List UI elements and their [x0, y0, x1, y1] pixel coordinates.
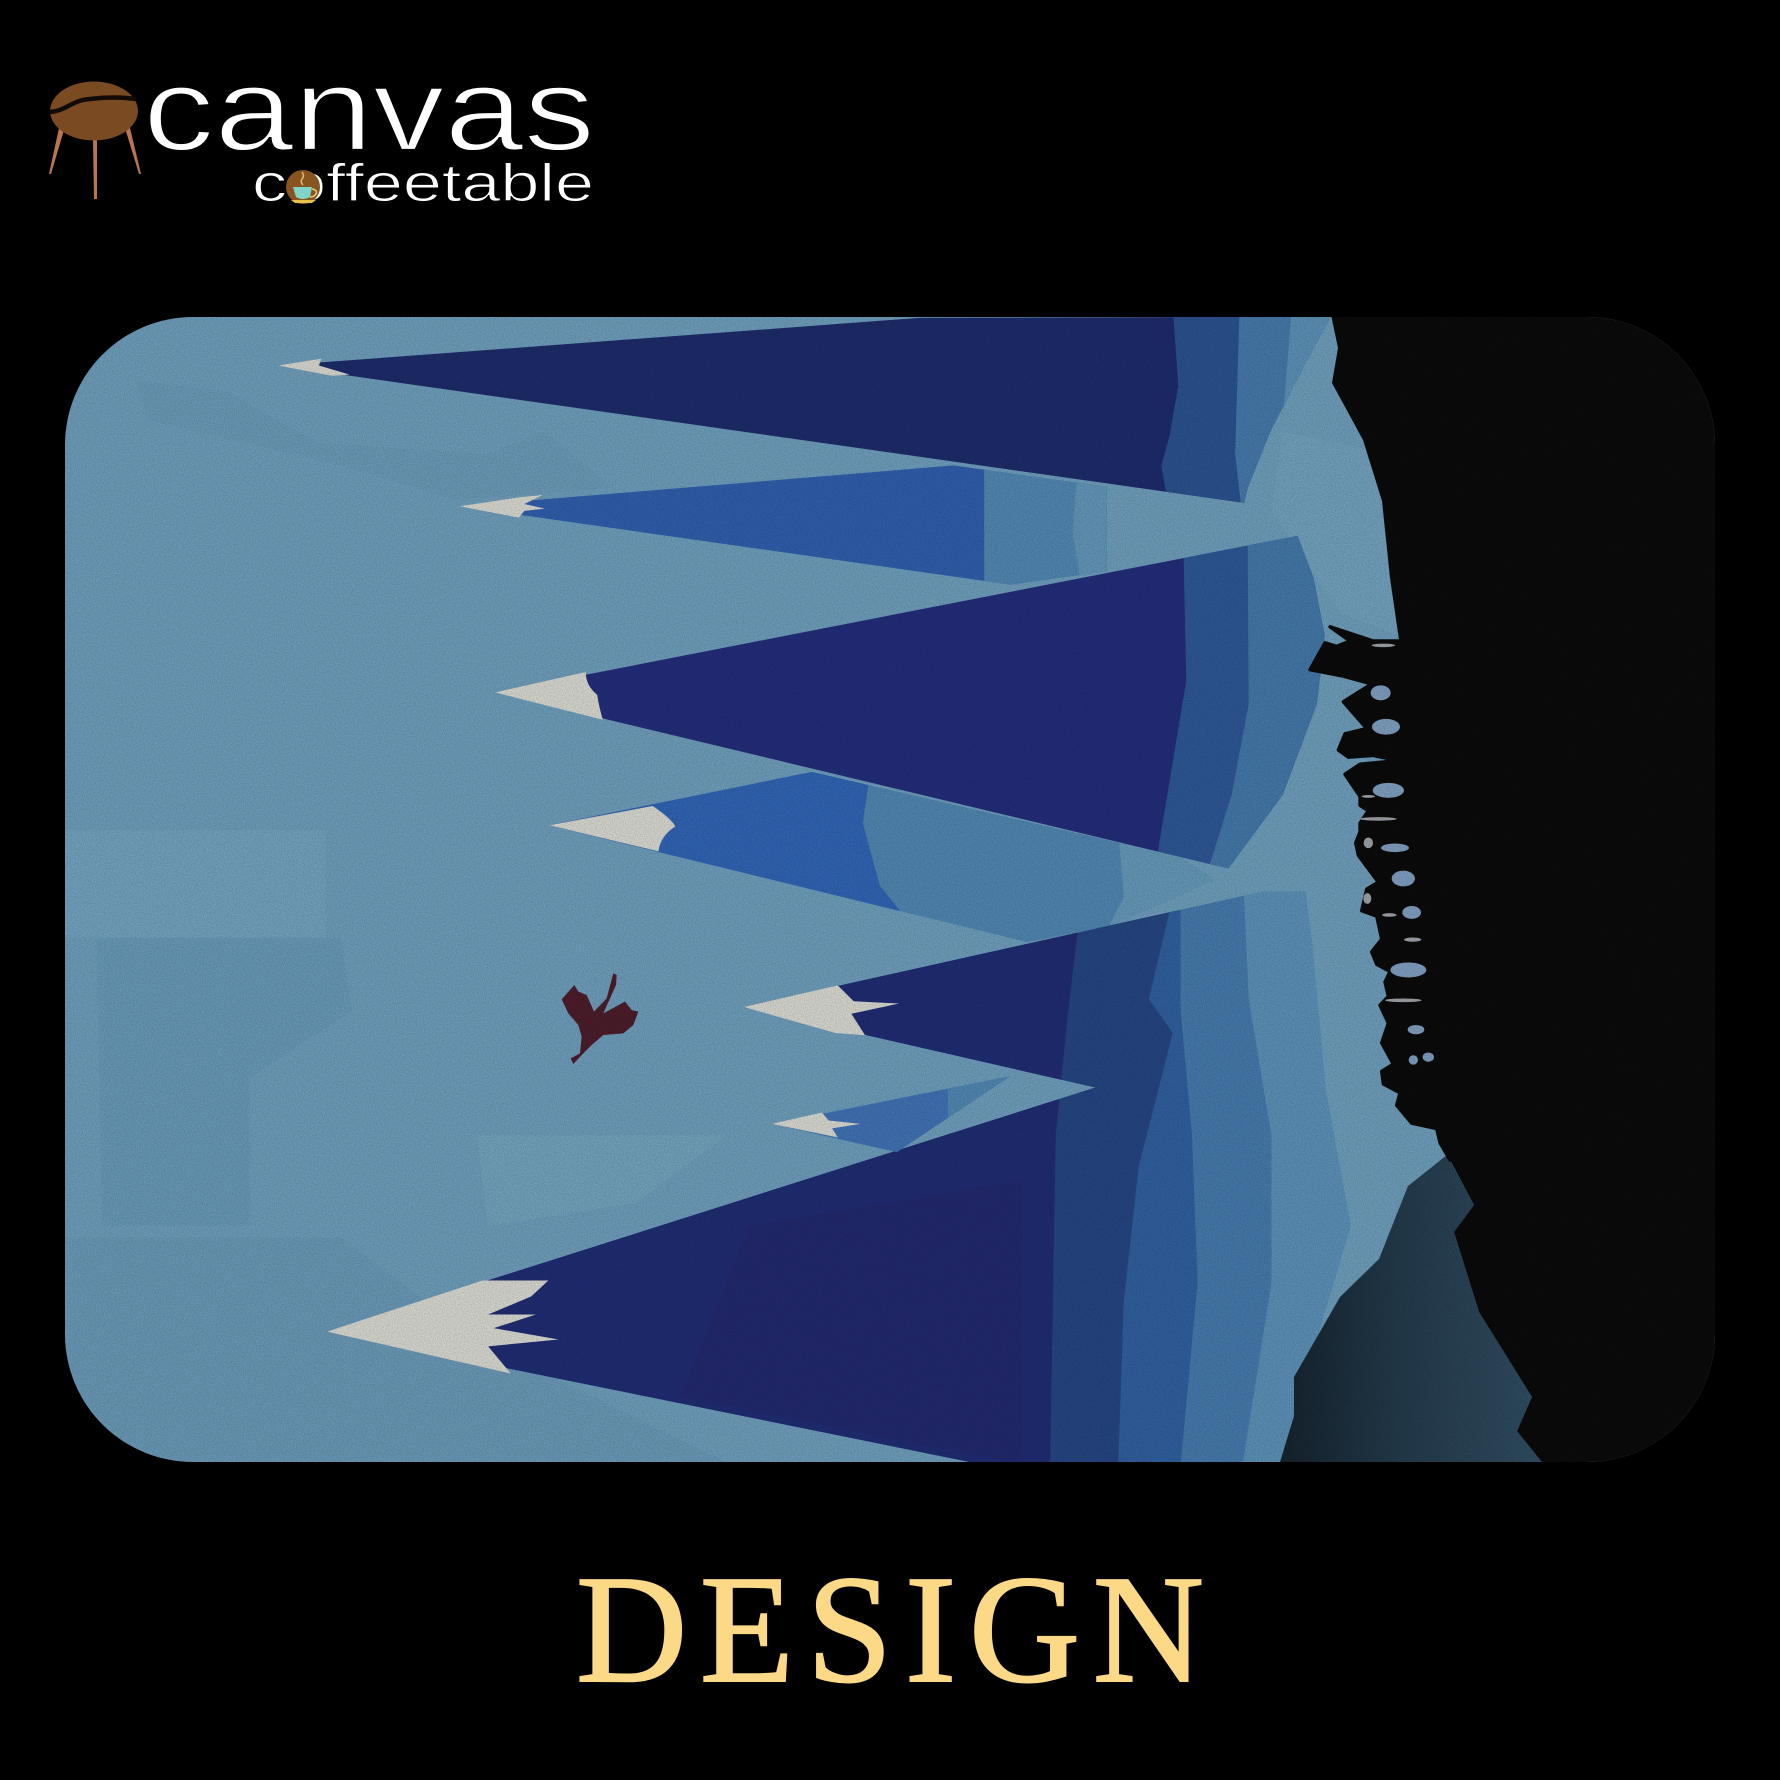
icon: coffee cup	[286, 170, 320, 204]
mountain 3	[495, 536, 1325, 868]
icon: coffee bean table	[49, 82, 141, 199]
black cliff	[1330, 310, 1720, 1462]
watercolor sky blotches	[65, 380, 1399, 1462]
mountains 5 and 7 (merged mass)	[318, 874, 1385, 1476]
panel: bath mat artwork	[65, 307, 1720, 1476]
mountain 6	[772, 1076, 1010, 1152]
logo: canvas coffeetable	[49, 44, 595, 213]
mountain 1	[278, 317, 1330, 503]
mountains	[272, 307, 1385, 1476]
fellowship figures silhouette	[1308, 625, 1451, 1162]
title: DESIGN: DESIGN	[576, 1545, 1204, 1715]
canvas texture	[65, 317, 1540, 1462]
dark slate foothill	[1280, 1155, 1545, 1462]
mountain 2	[460, 466, 1107, 584]
wordmark: canvas: canvas	[143, 44, 595, 176]
sky background	[65, 317, 1715, 1462]
wordmark: coffeetable: coffeetable	[252, 154, 594, 213]
icon: flying dragon	[562, 973, 638, 1064]
mountain 4	[550, 772, 1214, 942]
snow caps	[278, 359, 899, 1374]
